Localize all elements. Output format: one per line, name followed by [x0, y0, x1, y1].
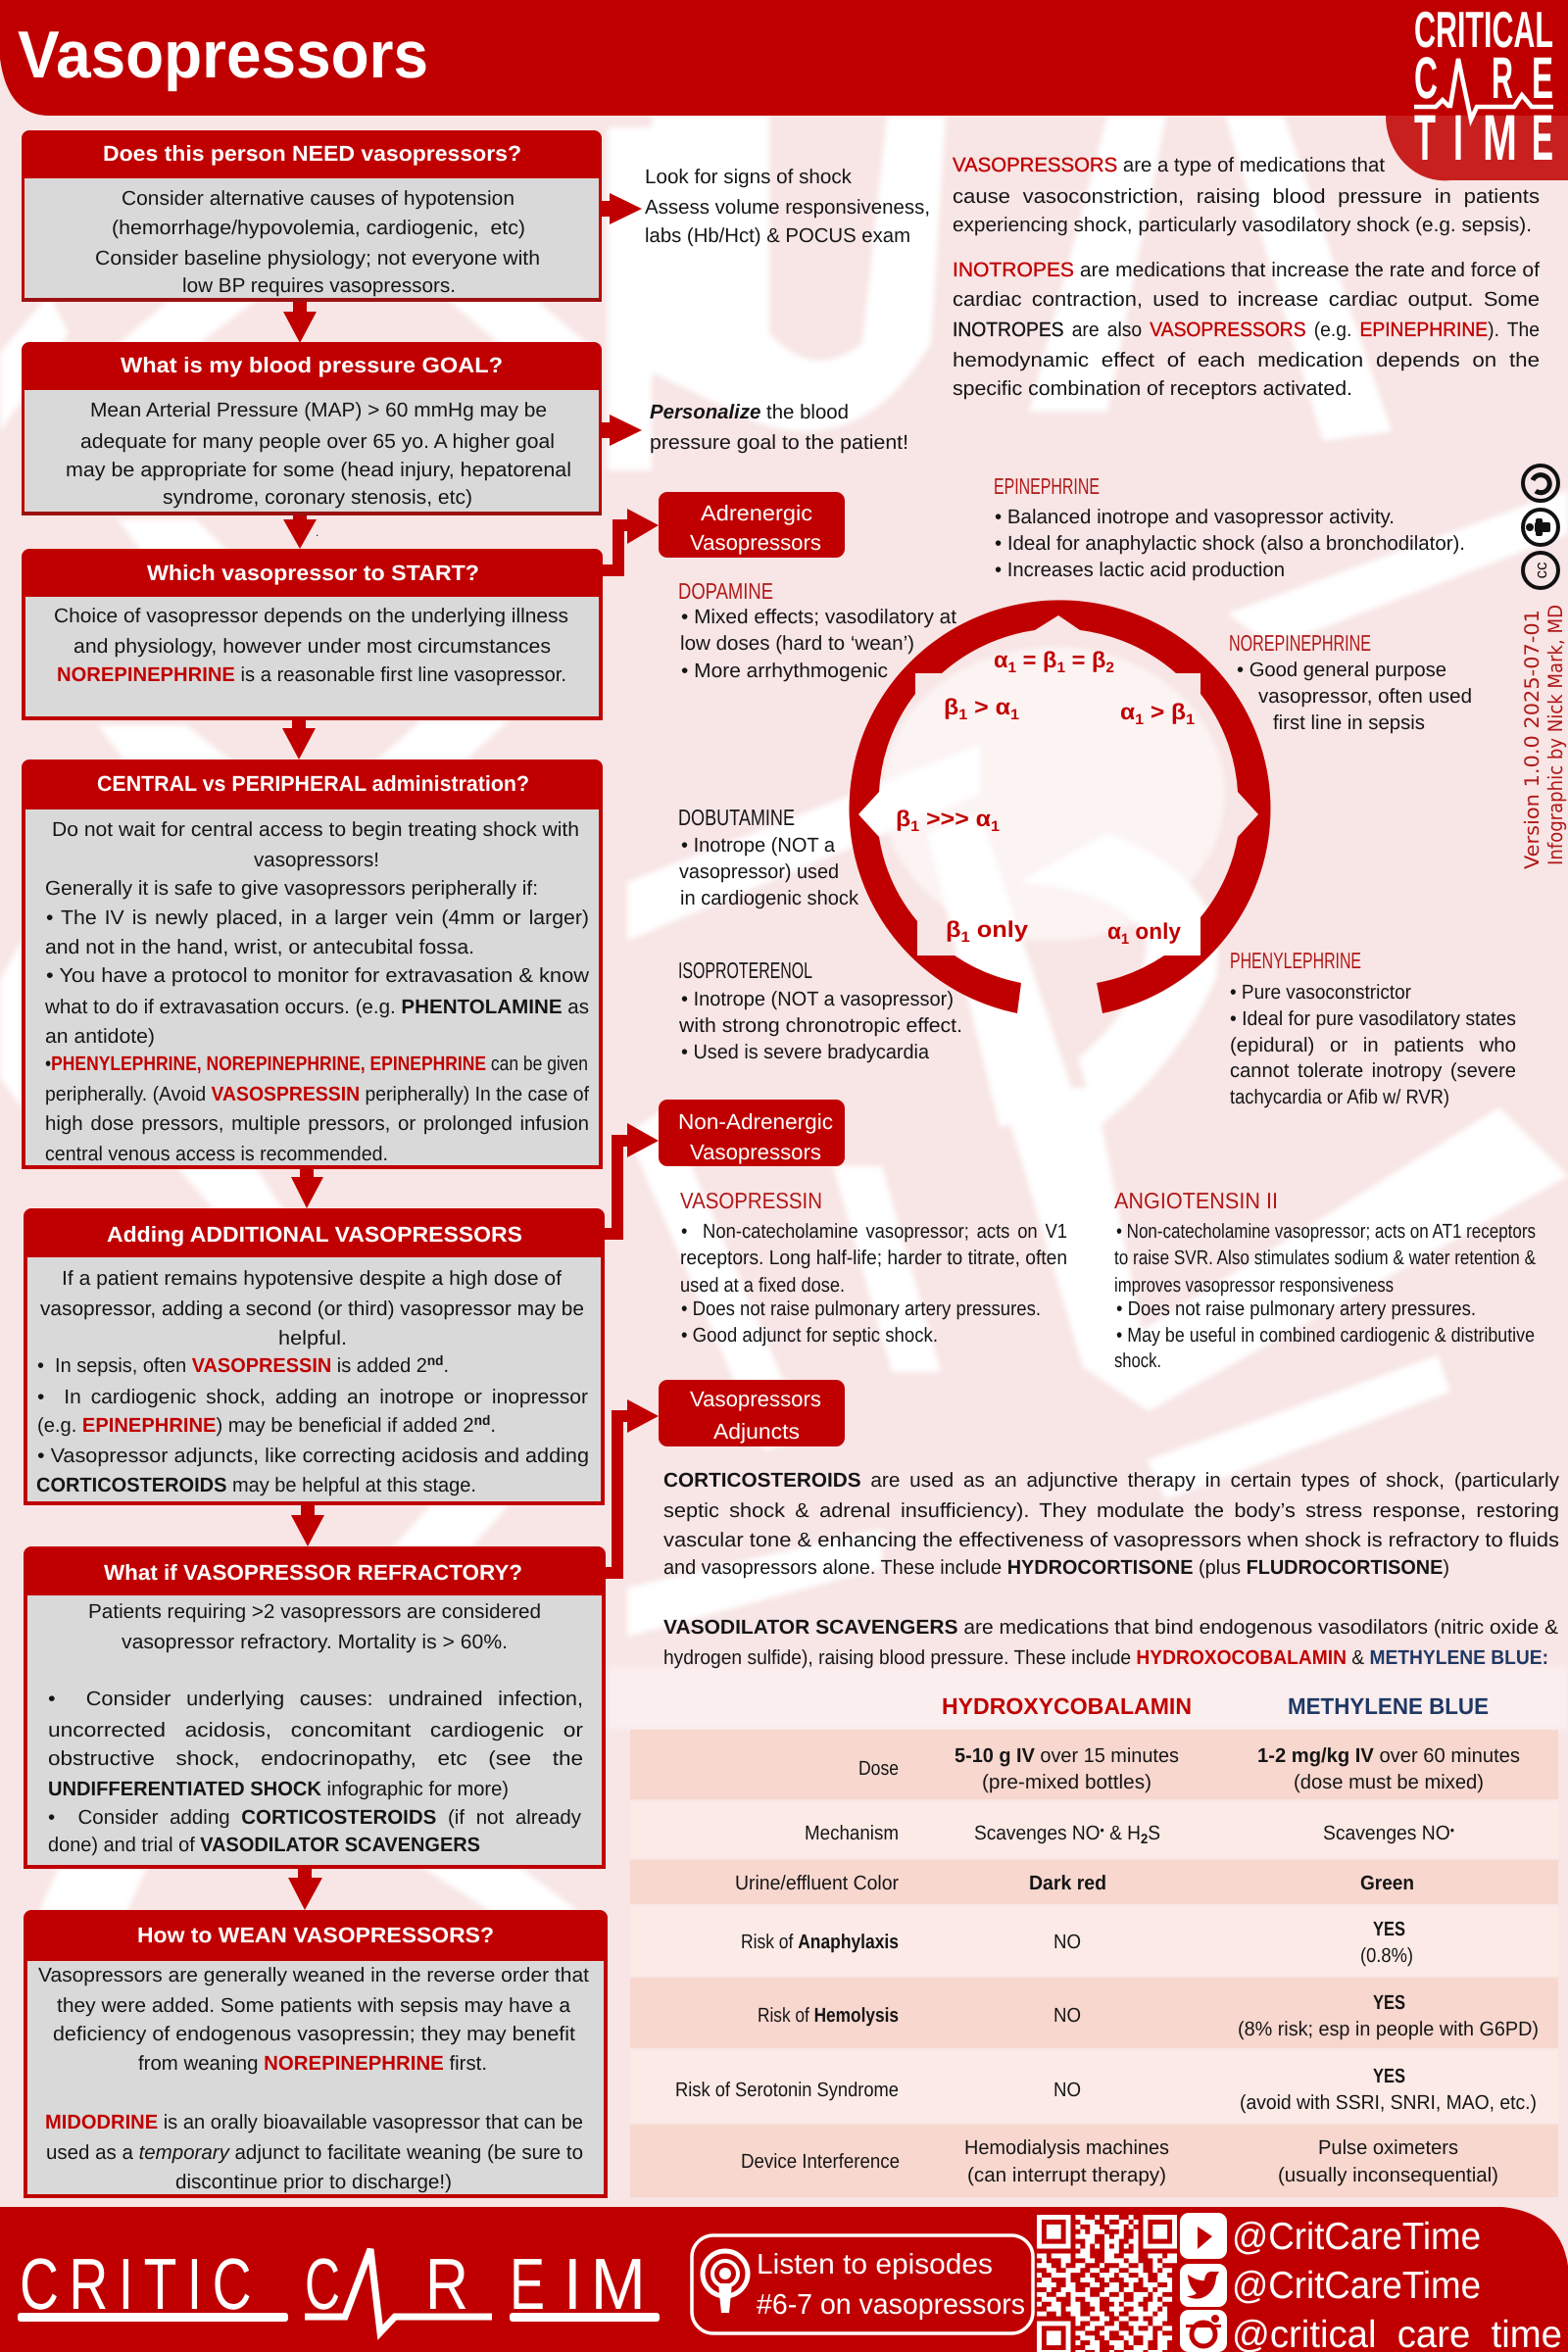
- body text: MIDODRINE is an orally bioavailable vasopressor that can be: [45, 2111, 583, 2133]
- text: vasopressin: receptors. Long half-life; harder to titrate, often: [680, 1247, 1067, 1269]
- panel: non-adrenergic label: Vasopressors: [690, 1140, 821, 1164]
- body text: [66, 399, 571, 509]
- heading: Which vasopressor to START?: [147, 561, 479, 585]
- body text: an antidote): [45, 1025, 155, 1048]
- body text: they were added. Some patients with sepsis may have a: [57, 1994, 571, 2017]
- label: alpha beta beta: 2: [1105, 660, 1114, 676]
- text: personalize goal: pressure goal to the patient!: [650, 431, 908, 454]
- text: isoproterenol: with strong chronotropic effect.: [678, 1014, 962, 1037]
- body text: Consider baseline physiology; not everyone with: [95, 247, 540, 270]
- panel: adding additional vasopressors: [24, 1208, 605, 1505]
- arrow: box 6 to box 7: [288, 1869, 322, 1910]
- logo: Critical Care Time: T: [1414, 101, 1436, 173]
- logo: Critical Care Time: [1386, 2, 1568, 180]
- text: corticosteroids: septic shock & adrenal insufficiency). They modulate the body’s stress response, restoring: [663, 1499, 1559, 1522]
- arrow: box 1 to box 2: [283, 302, 317, 343]
- podcast callout: [692, 2235, 1033, 2333]
- label: beta only: 1: [961, 929, 970, 946]
- text: epinephrine: [994, 473, 1465, 581]
- body text: central venous access is recommended.: [45, 1143, 388, 1165]
- panel: adjuncts label: Vasopressors: [690, 1387, 821, 1411]
- label: beta only: only: [970, 916, 1028, 942]
- row: mechanism: •: [1101, 1823, 1104, 1838]
- text: phenylephrine: cannot tolerate inotropy (severe: [1230, 1059, 1516, 1082]
- panel: wean vasopressors: [24, 1910, 608, 2198]
- label: alpha only: 1: [1121, 931, 1129, 948]
- panel: non-adrenergic label: Non-Adrenergic: [678, 1109, 833, 1134]
- body text: .: [443, 1354, 449, 1377]
- text: epinephrine: • Balanced inotrope and vasopressor activity.: [995, 506, 1395, 528]
- label: alpha over beta: 1: [1186, 711, 1195, 728]
- arrow: personalize: [602, 415, 642, 446]
- arrow: shock signs: [602, 193, 642, 224]
- logo: Critical Care Time: R: [1492, 45, 1513, 111]
- body text: [95, 187, 540, 297]
- text: norepinephrine: vasopressor, often used: [1258, 685, 1472, 708]
- row: anaphylaxis: YES: [1373, 1918, 1405, 1940]
- QR code: [1037, 2215, 1177, 2352]
- text: vasodilator scavengers: [663, 1616, 1558, 1669]
- text: dobutamine: in cardiogenic shock: [680, 887, 859, 909]
- row: dose: 5-10 g IV over 15 minutes: [955, 1744, 1179, 1767]
- table: scavenger comparison: [630, 1693, 1558, 2197]
- arrow: box 5 to box 6: [291, 1504, 324, 1546]
- text: norepinephrine: • Good general purpose: [1237, 659, 1446, 681]
- panel: adjuncts label: Adjuncts: [713, 1419, 800, 1444]
- panel: blood pressure goal: [22, 342, 602, 515]
- body text: used as a temporary adjunct to facilitate weaning (be sure to: [46, 2141, 583, 2164]
- label: alpha beta beta: 1: [1008, 660, 1016, 676]
- text: look for signs of shock: labs (Hb/Hct) & POCUS exam: [645, 224, 910, 247]
- body text: (e.g. EPINEPHRINE) may be beneficial if added 2: [37, 1414, 478, 1437]
- row: urine color: Green: [1360, 1872, 1414, 1894]
- heading: How to WEAN VASOPRESSORS?: [137, 1923, 494, 1947]
- row: device interference: (usually inconsequential): [1278, 2164, 1498, 2186]
- connector: to adrenergic: [603, 509, 659, 570]
- body text: Do not wait for central access to begin treating shock with: [52, 818, 579, 841]
- label: alpha only: only: [1129, 918, 1181, 944]
- logo: Critical Care Time: I: [1453, 101, 1463, 173]
- text: isoproterenol: • Used is severe bradycardia: [681, 1041, 930, 1063]
- text: definitions: experiencing shock, particularly vasodilatory shock (e.g. sepsis).: [953, 214, 1532, 236]
- body text: Generally it is safe to give vasopressors peripherally if:: [45, 877, 538, 900]
- text: look for signs of shock: Assess volume responsiveness,: [645, 196, 930, 219]
- body text: and not in the hand, wrist, or antecubital fossa.: [45, 936, 474, 958]
- row: mechanism: S: [1148, 1822, 1160, 1844]
- panel: adrenergic label: Adrenergic: [701, 501, 812, 525]
- label: alpha beta beta: α: [994, 647, 1007, 672]
- text: phenylephrine: • Pure vasoconstrictor: [1230, 981, 1411, 1004]
- label: beta much greater than alpha: 1: [991, 818, 1000, 835]
- row: dose: (dose must be mixed): [1294, 1771, 1484, 1793]
- heading: Adding ADDITIONAL VASOPRESSORS: [107, 1222, 522, 1247]
- row: hemolysis: (8% risk; esp in people with G6PD): [1238, 2018, 1539, 2040]
- body text: discontinue prior to discharge!): [175, 2171, 452, 2193]
- body text: [48, 1600, 583, 1856]
- heading: CENTRAL vs PERIPHERAL administration?: [97, 771, 529, 796]
- label: alpha over beta: > β: [1144, 699, 1186, 724]
- arrow: box 4 to box 5: [291, 1169, 323, 1208]
- row: mechanism: Scavenges NO: [1323, 1822, 1458, 1844]
- text: epinephrine: • Ideal for anaphylactic shock (also a bronchodilator).: [995, 532, 1465, 555]
- label: beta over alpha: β: [944, 694, 957, 719]
- label: alpha beta beta: = β: [1065, 647, 1105, 672]
- arrow: box 2 to box 3: [283, 515, 317, 549]
- chart: receptor ring: [849, 600, 1271, 1013]
- body text: • In sepsis, often VASOPRESSIN is added 2: [37, 1354, 430, 1377]
- body text: obstructive shock, endocrinopathy, etc (see the: [48, 1747, 583, 1770]
- body text: Vasopressors are generally weaned in the reverse order that: [38, 1964, 589, 1986]
- row: anaphylaxis: NO: [1054, 1931, 1081, 1953]
- label: alpha beta beta: = β: [1016, 647, 1056, 672]
- text: version and author: Infographic by Nick Mark, MD: [1544, 605, 1567, 865]
- column heading: methylene blue: METHYLENE BLUE: [1288, 1693, 1489, 1719]
- body text: low BP requires vasopressors.: [182, 274, 456, 297]
- text: vasopressin: [680, 1188, 1067, 1347]
- footer logo: CRITIC: [20, 2243, 262, 2325]
- panel: adjuncts label: [659, 1380, 845, 1446]
- row: serotonin syndrome: YES: [1373, 2065, 1405, 2087]
- text: definitions: cardiac contraction, used to increase cardiac output. Some: [953, 288, 1540, 311]
- heading: What if VASOPRESSOR REFRACTORY?: [104, 1560, 522, 1585]
- text: dobutamine: vasopressor) used: [679, 860, 839, 883]
- body text: nd: [474, 1412, 490, 1428]
- panel: need vasopressors: [22, 130, 602, 302]
- text: corticosteroids: vascular tone & enhancing the effectiveness of vasopressors when shock is refractory to fluids: [663, 1529, 1559, 1551]
- text: phenylephrine: [1230, 948, 1516, 1108]
- text: vasopressin: • Good adjunct for septic shock.: [681, 1324, 938, 1347]
- body text: If a patient remains hypotensive despite a high dose of: [62, 1267, 562, 1290]
- text: definitions: [953, 154, 1540, 400]
- row: dose: (pre-mixed bottles): [982, 1771, 1152, 1793]
- text: dobutamine: [678, 805, 859, 909]
- body text: [38, 1964, 589, 2193]
- text: vasopressin: • Does not raise pulmonary artery pressures.: [681, 1298, 1041, 1320]
- row: device interference: Hemodialysis machines: [964, 2136, 1169, 2159]
- body text: (hemorrhage/hypovolemia, cardiogenic, etc): [112, 217, 525, 239]
- body text: vasopressor refractory. Mortality is > 60%.: [122, 1631, 508, 1653]
- text: norepinephrine: NOREPINEPHRINE: [1229, 630, 1371, 656]
- panel: vasopressor refractory: [24, 1546, 606, 1869]
- footer logo: C: [305, 2243, 340, 2325]
- text: norepinephrine: first line in sepsis: [1273, 711, 1425, 734]
- text: version and author: [1520, 605, 1567, 869]
- row: anaphylaxis: Risk of Anaphylaxis: [741, 1931, 899, 1953]
- body text: peripherally. (Avoid VASOSPRESSIN peripherally) In the case of: [45, 1083, 589, 1105]
- row: anaphylaxis: (0.8%): [1360, 1944, 1413, 1967]
- body text: high dose pressors, multiple pressors, or prolonged infusion: [45, 1112, 589, 1135]
- row: device interference: Device Interference: [741, 2150, 900, 2173]
- text: isoproterenol: • Inotrope (NOT a vasopressor): [681, 988, 954, 1010]
- row: mechanism: & H: [1104, 1822, 1141, 1844]
- body text: NOREPINEPHRINE is a reasonable first line vasopressor.: [57, 663, 566, 686]
- body text: nd: [427, 1352, 443, 1368]
- text: definitions: specific combination of receptors activated.: [953, 377, 1352, 400]
- footer logo: R: [425, 2243, 468, 2325]
- social handles: @CritCareTime: [1232, 2265, 1481, 2307]
- body text: vasopressor, adding a second (or third) vasopressor may be: [40, 1298, 584, 1320]
- body text: syndrome, coronary stenosis, etc): [163, 486, 472, 509]
- connector: to adjuncts: [606, 1399, 659, 1573]
- icons: creative commons: cc: [1532, 562, 1550, 578]
- text: dobutamine: DOBUTAMINE: [678, 805, 795, 830]
- text: norepinephrine: [1229, 630, 1472, 734]
- logo: Critical Care Time: C: [1414, 45, 1438, 111]
- row: dose: Dose: [858, 1757, 899, 1780]
- body text: • You have a protocol to monitor for extravasation & know: [46, 964, 589, 987]
- body text: •PHENYLEPHRINE, NOREPINEPHRINE, EPINEPHRINE can be given: [45, 1053, 588, 1075]
- text: phenylephrine: PHENYLEPHRINE: [1230, 948, 1361, 973]
- body text: [36, 1267, 589, 1496]
- label: beta over alpha: > α: [967, 694, 1010, 719]
- body text: .: [490, 1414, 496, 1437]
- row: anaphylaxis: [630, 1906, 1558, 1976]
- row: serotonin syndrome: [630, 2050, 1558, 2123]
- text: vasopressin: VASOPRESSIN: [680, 1188, 822, 1213]
- body text: deficiency of endogenous vasopressin; they may benefit: [53, 2023, 575, 2045]
- label: alpha only: α: [1107, 918, 1121, 944]
- icon: youtube: [1180, 2213, 1227, 2259]
- body text: • Vasopressor adjuncts, like correcting acidosis and adding: [37, 1445, 589, 1467]
- row: serotonin syndrome: NO: [1054, 2079, 1081, 2101]
- text: personalize goal: Personalize the blood: [650, 401, 849, 423]
- text: dopamine: [678, 578, 956, 682]
- body text: adequate for many people over 65 yo. A higher goal: [80, 430, 555, 453]
- body text: from weaning NOREPINEPHRINE first.: [138, 2052, 487, 2075]
- text: vasodilator scavengers: VASODILATOR SCAVENGERS are medications that bind endogenous vasodilators (nitric oxide &: [663, 1616, 1558, 1639]
- text: corticosteroids: CORTICOSTEROIDS are used as an adjunctive therapy in certain types of shock, (particularly: [663, 1469, 1560, 1492]
- text: dopamine: low doses (hard to ‘wean’): [680, 632, 914, 655]
- footer logo: [18, 2243, 660, 2332]
- body text: and physiology, however under most circumstances: [74, 635, 551, 658]
- text: corticosteroids: and vasopressors alone. These include HYDROCORTISONE (plus FLUDROCORTISONE): [663, 1556, 1449, 1579]
- text: epinephrine: EPINEPHRINE: [994, 473, 1100, 499]
- text: vasopressin: used at a fixed dose.: [680, 1274, 845, 1297]
- text: angiotensin II: [1114, 1188, 1536, 1372]
- label: beta over alpha: 1: [1010, 707, 1019, 723]
- body text: what to do if extravasation occurs. (e.g. PHENTOLAMINE as: [44, 996, 589, 1018]
- panel: adrenergic label: Vasopressors: [690, 530, 821, 555]
- body text: may be appropriate for some (head injury, hepatorenal: [66, 459, 571, 481]
- panel: central vs peripheral: [22, 760, 603, 1169]
- text: definitions: VASOPRESSORS are a type of medications that: [953, 154, 1385, 176]
- social handles: [1232, 2216, 1562, 2352]
- text: personalize goal: [650, 401, 908, 454]
- text: isoproterenol: [678, 957, 962, 1063]
- text: phenylephrine: tachycardia or Afib w/ RVR): [1230, 1086, 1449, 1108]
- text: phenylephrine: • Ideal for pure vasodilatory states: [1230, 1007, 1516, 1030]
- label: beta much greater than alpha: >>> α: [919, 806, 991, 831]
- row: mechanism: Mechanism: [805, 1822, 899, 1844]
- body text: UNDIFFERENTIATED SHOCK infographic for more): [48, 1778, 509, 1800]
- panel: adrenergic label: [659, 492, 845, 558]
- row: urine color: Urine/effluent Color: [735, 1872, 899, 1894]
- icon: podcast: [703, 2251, 748, 2313]
- label: beta only: β: [946, 916, 959, 942]
- logo: Critical Care Time: M: [1483, 101, 1517, 173]
- row: mechanism: Scavenges NO: [974, 1822, 1109, 1844]
- row: mechanism: •: [1450, 1823, 1454, 1838]
- row: hemolysis: NO: [1054, 2004, 1081, 2027]
- heading: Does this person NEED vasopressors?: [103, 141, 521, 166]
- text: epinephrine: • Increases lactic acid production: [995, 559, 1285, 581]
- row: serotonin syndrome: (avoid with SSRI, SNRI, MAO, etc.): [1240, 2091, 1537, 2114]
- heading: What is my blood pressure GOAL?: [121, 353, 503, 377]
- arrow: box 3 to box 4: [282, 720, 316, 760]
- label: alpha over beta: 1: [1135, 711, 1144, 728]
- social handles: @CritCareTime: [1232, 2216, 1481, 2258]
- text: dobutamine: • Inotrope (NOT a: [681, 834, 836, 857]
- text: definitions: INOTROPES are also VASOPRESSORS (e.g. EPINEPHRINE). The: [953, 318, 1540, 341]
- row: hemolysis: Risk of Hemolysis: [758, 2004, 899, 2027]
- body text: CORTICOSTEROIDS may be helpful at this stage.: [36, 1474, 476, 1496]
- text: dopamine: DOPAMINE: [678, 578, 773, 604]
- text: definitions: hemodynamic effect of each medication depends on the: [953, 349, 1540, 371]
- text: corticosteroids: [663, 1469, 1560, 1579]
- icons: creative commons: [1523, 466, 1558, 588]
- text: dopamine: • More arrhythmogenic: [681, 660, 888, 682]
- text: isoproterenol: ISOPROTERENOL: [678, 957, 812, 983]
- label: alpha over beta: α: [1120, 699, 1134, 724]
- body text: • Consider adding CORTICOSTEROIDS (if not already: [48, 1806, 582, 1829]
- body text: Consider alternative causes of hypotension: [122, 187, 514, 210]
- text: version and author: Version 1.0.0 2025-07-01: [1520, 610, 1544, 869]
- column heading: hydroxycobalamin: HYDROXYCOBALAMIN: [942, 1693, 1192, 1719]
- text: .: [316, 525, 318, 539]
- body text: • In cardiogenic shock, adding an inotrope or inopressor: [37, 1386, 588, 1408]
- text: look for signs of shock: [645, 166, 930, 247]
- panel: non-adrenergic label: [659, 1100, 845, 1166]
- header banner: [0, 0, 1568, 116]
- text: angiotensin II: • Does not raise pulmonary artery pressures.: [1116, 1298, 1476, 1320]
- footer logo: E: [510, 2243, 545, 2325]
- row: urine color: [630, 1860, 1558, 1904]
- podcast callout: #6-7 on vasopressors: [757, 2289, 1025, 2321]
- row: device interference: Pulse oximeters: [1318, 2136, 1458, 2159]
- text: definitions: INOTROPES are medications that increase the rate and force of: [953, 259, 1540, 281]
- icon: instagram: [1180, 2310, 1227, 2352]
- body text: Mean Arterial Pressure (MAP) > 60 mmHg may be: [90, 399, 547, 421]
- row: hemolysis: [630, 1978, 1558, 2048]
- body text: helpful.: [278, 1327, 347, 1349]
- row: hemolysis: YES: [1373, 1991, 1405, 2014]
- body text: [54, 605, 568, 686]
- label: beta over alpha: 1: [958, 707, 967, 723]
- body text: • The IV is newly placed, in a larger vein (4mm or larger): [46, 906, 589, 929]
- title: Vasopressors: [18, 18, 428, 92]
- body text: done) and trial of VASODILATOR SCAVENGERS: [48, 1834, 480, 1856]
- podcast callout: Listen to episodes: [757, 2249, 993, 2280]
- icon: twitter: [1180, 2264, 1227, 2307]
- text: vasodilator scavengers: hydrogen sulfide), raising blood pressure. These include HYDROXOCOBALAMIN & METHYLENE BLUE:: [663, 1646, 1548, 1669]
- label: beta much greater than alpha: 1: [910, 818, 919, 835]
- row: mechanism: [630, 1801, 1558, 1858]
- row: serotonin syndrome: Risk of Serotonin Syndrome: [675, 2079, 899, 2101]
- row: urine color: Dark red: [1029, 1872, 1106, 1894]
- footer banner: [0, 2207, 1568, 2352]
- text: vasopressin: • Non-catecholamine vasopressor; acts on V1: [681, 1220, 1067, 1243]
- row: dose: [630, 1730, 1558, 1799]
- text: definitions: cause vasoconstriction, raising blood pressure in patients: [953, 185, 1540, 208]
- body text: Choice of vasopressor depends on the underlying illness: [54, 605, 568, 627]
- label: alpha beta beta: 1: [1056, 660, 1065, 676]
- row: device interference: [630, 2125, 1558, 2197]
- text: angiotensin II: improves vasopressor responsiveness: [1114, 1274, 1394, 1297]
- body text: • Consider underlying causes: undrained infection,: [48, 1688, 583, 1710]
- text: phenylephrine: (epidural) or in patients who: [1230, 1034, 1516, 1056]
- text: angiotensin II: shock.: [1114, 1349, 1161, 1372]
- text: look for signs of shock: Look for signs of shock: [645, 166, 853, 188]
- text: angiotensin II: ANGIOTENSIN II: [1114, 1188, 1278, 1213]
- body text: uncorrected acidosis, concomitant cardiogenic or: [48, 1719, 583, 1741]
- body text: vasopressors!: [254, 849, 379, 871]
- connector: to non-adrenergic: [605, 1123, 659, 1234]
- text: dopamine: • Mixed effects; vasodilatory at: [681, 606, 956, 628]
- row: dose: 1-2 mg/kg IV over 60 minutes: [1257, 1744, 1520, 1767]
- row: mechanism: 2: [1141, 1831, 1148, 1846]
- body text: [44, 818, 589, 1165]
- footer logo: IM: [564, 2243, 655, 2325]
- body text: Patients requiring >2 vasopressors are considered: [88, 1600, 541, 1623]
- row: device interference: (can interrupt therapy): [967, 2164, 1166, 2186]
- label: beta much greater than alpha: β: [896, 806, 909, 831]
- panel: which vasopressor to start: [22, 549, 603, 720]
